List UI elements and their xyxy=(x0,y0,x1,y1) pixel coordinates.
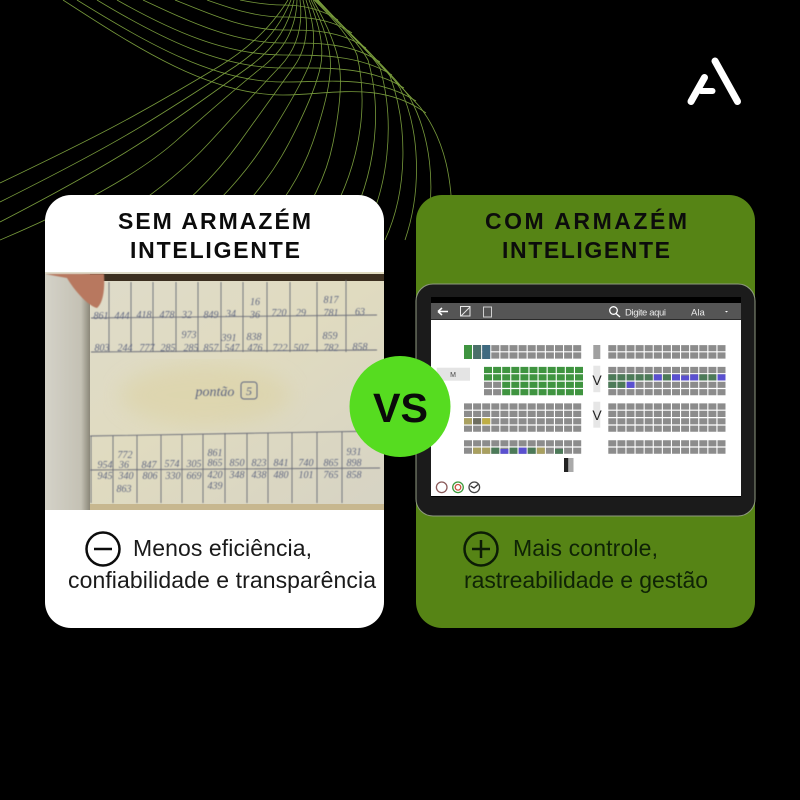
photo: handwritten paper map: 244 xyxy=(118,343,132,354)
photo: handwritten paper map: 740 xyxy=(298,458,314,469)
app toolbar xyxy=(431,303,741,320)
panel background white xyxy=(45,195,384,628)
app toolbar: Ala xyxy=(691,308,705,318)
label M: M xyxy=(450,372,456,379)
screen xyxy=(431,297,741,497)
photo: handwritten paper map: 34 xyxy=(225,309,236,320)
photo: handwritten paper map: 63 xyxy=(355,307,365,318)
photo: handwritten paper map: 507 xyxy=(294,343,310,354)
photo: handwritten paper map: 803 xyxy=(94,343,110,354)
aisle markers xyxy=(592,345,602,428)
photo: handwritten paper map: 5 xyxy=(246,384,252,398)
heading: sem armazém xyxy=(118,207,311,263)
photo: handwritten paper map: 841 xyxy=(274,458,288,469)
photo: handwritten paper map: 777 xyxy=(140,343,156,354)
photo: handwritten paper map: 480 xyxy=(274,470,288,481)
photo: handwritten paper map: 954 xyxy=(98,460,112,471)
label M xyxy=(437,368,470,381)
photo: handwritten paper map: 348 xyxy=(228,470,244,481)
photo: handwritten paper map: 305 xyxy=(186,459,202,470)
photo: handwritten paper map: 817 xyxy=(324,295,340,306)
photo: handwritten paper map: 781 xyxy=(324,308,338,319)
photo: handwritten paper map: 782 xyxy=(324,343,338,354)
photo: handwritten paper map: 29 xyxy=(296,308,306,319)
photo: handwritten paper map: pontão xyxy=(195,385,234,400)
photo: handwritten paper map: 478 xyxy=(160,310,174,321)
aisle markers: V xyxy=(592,372,602,388)
photo: handwritten paper map: 418 xyxy=(136,310,152,321)
photo: handwritten paper map: 476 xyxy=(248,343,262,354)
photo: handwritten paper map: 973 xyxy=(182,330,196,341)
tablet screenshot xyxy=(416,284,755,516)
vs badge xyxy=(350,356,450,457)
photo: handwritten paper map: 36 xyxy=(249,310,260,321)
text: mais controle: Mais controle, xyxy=(513,535,658,561)
photo: handwritten paper map: 101 xyxy=(298,470,314,481)
app toolbar: Digite aqui xyxy=(625,308,666,318)
photo: handwritten paper map: 858 xyxy=(346,470,362,481)
panel: sem armazém inteligente xyxy=(45,195,384,628)
icon: plus xyxy=(464,532,498,566)
photo: handwritten paper map: 865 xyxy=(208,458,222,469)
heading: com armazém: INTELIGENTE xyxy=(502,237,670,263)
photo: handwritten paper map: 850 xyxy=(230,458,244,469)
photo: handwritten paper map: 859 xyxy=(322,331,338,342)
photo: handwritten paper map: 931 xyxy=(346,447,362,458)
aisle markers: V xyxy=(592,407,602,423)
text: menos eficiência: confiabilidade e transparência xyxy=(68,567,376,593)
photo: handwritten paper map: 574 xyxy=(164,459,180,470)
photo: handwritten paper map: 391 xyxy=(220,333,236,344)
photo: handwritten paper map: 898 xyxy=(346,458,362,469)
panel background green xyxy=(416,195,755,628)
photo: handwritten paper map: 438 xyxy=(252,470,266,481)
text: menos eficiência xyxy=(68,535,376,593)
photo: handwritten paper map: 861 xyxy=(208,448,222,459)
warehouse grid xyxy=(464,345,726,472)
photo: handwritten paper map: 36 xyxy=(118,460,129,471)
logo xyxy=(691,61,738,102)
photo: handwritten paper map: 847 xyxy=(142,460,158,471)
photo: handwritten paper map: 838 xyxy=(246,332,262,343)
photo: handwritten paper map: 863 xyxy=(116,484,132,495)
photo: handwritten paper map: 16 xyxy=(250,297,260,308)
photo: handwritten paper map: 330 xyxy=(164,471,180,482)
photo: handwritten paper map: 285 xyxy=(184,343,198,354)
photo: handwritten paper map: 945 xyxy=(98,471,112,482)
heading: com armazém xyxy=(485,207,687,263)
photo: handwritten paper map: 849 xyxy=(204,310,218,321)
map status icons xyxy=(436,482,480,493)
photo: handwritten paper map: 857 xyxy=(204,343,220,354)
heading: com armazém: COM ARMAZÉM xyxy=(485,207,687,234)
icon: minus xyxy=(86,532,120,566)
photo: handwritten paper map: 420 xyxy=(208,470,222,481)
heading: sem armazém: INTELIGENTE xyxy=(130,237,300,263)
photo: handwritten paper map: 865 xyxy=(324,458,338,469)
heading: sem armazém: SEM ARMAZÉM xyxy=(118,207,311,234)
tablet frame xyxy=(416,284,755,516)
panel: com armazém inteligente xyxy=(416,195,755,628)
photo: handwritten paper map: 340 xyxy=(118,471,134,482)
photo: handwritten paper map: 439 xyxy=(208,481,222,492)
photo: handwritten paper map xyxy=(45,272,384,510)
photo: handwritten paper map: 720 xyxy=(272,308,286,319)
photo: handwritten paper map: 806 xyxy=(142,471,158,482)
text: mais controle: rastreabilidade e gestão xyxy=(464,567,708,593)
photo: handwritten paper map: 772 xyxy=(118,450,132,461)
photo: handwritten paper map: 32 xyxy=(181,310,192,321)
photo: handwritten paper map: 765 xyxy=(324,470,338,481)
decorative line wave xyxy=(0,0,452,240)
photo: handwritten paper map: 823 xyxy=(252,458,266,469)
text: mais controle xyxy=(464,535,708,593)
photo: handwritten paper map: 669 xyxy=(186,471,202,482)
photo: handwritten paper map: 285 xyxy=(160,343,176,354)
vs badge: VS xyxy=(373,385,428,431)
text: menos eficiência: Menos eficiência, xyxy=(133,535,312,561)
photo: handwritten paper map: 444 xyxy=(114,311,130,322)
photo: handwritten paper map: 547 xyxy=(224,343,240,354)
photo: handwritten paper map: 858 xyxy=(352,342,368,353)
photo: handwritten paper map: 861 xyxy=(94,311,108,322)
photo: handwritten paper map: 722 xyxy=(272,343,288,354)
